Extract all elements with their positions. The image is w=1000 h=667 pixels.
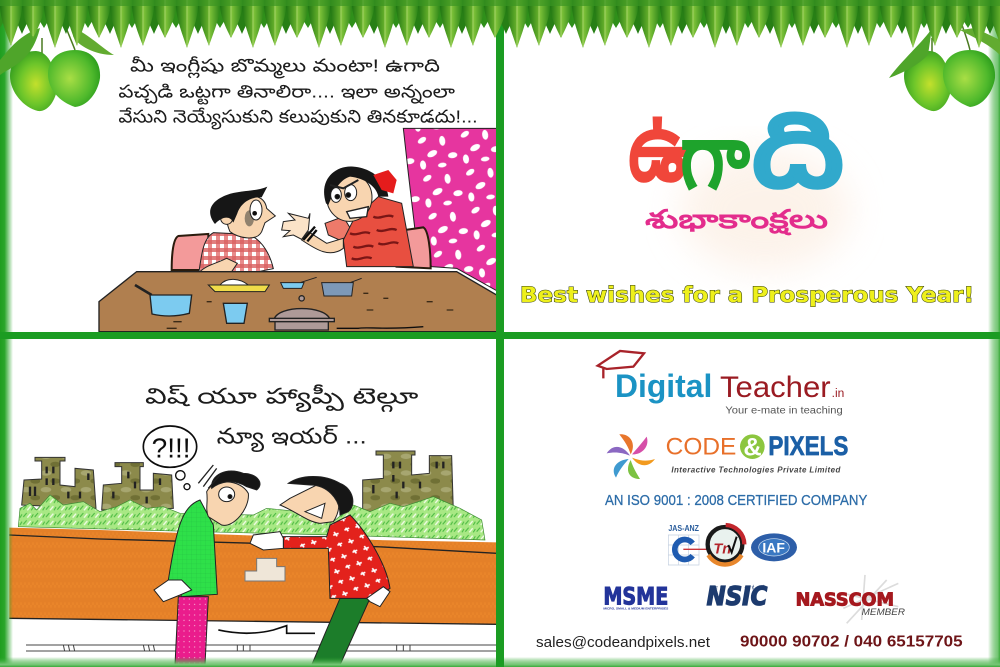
artist signature [337, 327, 423, 328]
MSME logo: MSME [603, 582, 668, 610]
hedge [18, 495, 485, 540]
IAF logo [751, 533, 797, 561]
panel: top-left cartoon, family at dinner table [99, 56, 497, 332]
hand with food [200, 258, 237, 278]
right chair [397, 227, 431, 268]
pink polka-dot curtain [403, 128, 497, 291]
TNV certification seal [708, 525, 744, 565]
hand-lettered Telugu speech: పచ్చడి ఒట్టగా తినాలిరా.... ఇలా అన్నంలా [118, 81, 455, 104]
icon: right mangoes with leaves [889, 25, 1000, 111]
Best wishes headline: Best wishes for a Prosperous Year! [520, 283, 974, 307]
eye socket shadow [245, 210, 254, 226]
hair [212, 471, 260, 490]
confused man in green [154, 465, 260, 665]
Code & Pixels logo: PIXELS [768, 431, 848, 461]
hair [210, 187, 267, 224]
NSIC logo: NSIC [707, 581, 768, 611]
hand [154, 580, 192, 602]
Digital Teacher logo: Your e-mate in teaching [725, 406, 843, 417]
pinwheel icon [607, 434, 655, 479]
Ugadi logotype [628, 90, 844, 209]
MSME logo: MICRO, SMALL & MEDIUM ENTERPRISES [603, 606, 668, 610]
eyes [219, 487, 235, 502]
NASSCOM member logo [796, 575, 905, 623]
hand-lettered Telugu speech: వేసుని నెయ్యేసుకుని కలుపుకుని తినకూడదు!... [118, 107, 478, 130]
Digital Teacher logo: .in [832, 386, 844, 400]
panel: company logos and contact details [536, 351, 963, 651]
NASSCOM member logo: NASSCOM [796, 589, 894, 610]
grey pot [322, 278, 362, 296]
exposed bricks [245, 558, 285, 581]
leaf, long left [0, 28, 40, 75]
Ugadi logotype: ది [752, 92, 844, 209]
Ugadi logotype: ఉ [628, 90, 690, 202]
leaf, right [73, 30, 114, 55]
left chair [172, 234, 208, 270]
ISO certification line: AN ISO 9001 : 2008 CERTIFIED COMPANY [605, 493, 868, 509]
head [227, 195, 275, 238]
email address: sales@codeandpixels.net [536, 635, 710, 651]
small bowl with ladle [281, 277, 317, 288]
phone numbers: 90000 90702 / 040 65157705 [740, 633, 963, 650]
TNV certification seal: Tn [713, 541, 731, 557]
blue pot [135, 285, 192, 316]
head [327, 173, 372, 221]
Subhakankshalu greeting: శుభాకాంక్షలు [645, 204, 828, 236]
mango, rear [10, 51, 57, 111]
ampersand badge: & [743, 434, 762, 462]
ear [221, 212, 233, 224]
mango, front [943, 50, 995, 107]
pink trousers [175, 597, 208, 665]
sari [343, 197, 413, 267]
red floral shirt [283, 515, 390, 598]
head [207, 482, 248, 525]
green shirt [168, 500, 217, 597]
Code & Pixels logo [607, 431, 848, 479]
hand-lettered Telugu speech [118, 56, 478, 130]
starburst [843, 575, 898, 623]
hand-lettered Telugu caption: విష్ యూ హ్యాప్పీ టెల్గూ [145, 383, 419, 412]
NSIC logo: एन एस आई सी [715, 584, 766, 590]
JAS-ANZ mark [668, 524, 707, 565]
thought bubble [143, 426, 197, 490]
Digital Teacher logo [598, 351, 844, 417]
sari pattern [350, 216, 398, 259]
Digital Teacher logo: Digital [615, 367, 712, 404]
hair [324, 167, 388, 205]
wall cracks [9, 535, 497, 624]
buildings [22, 451, 453, 512]
panel: bottom-left cartoon, Happy Telugu New Year [9, 383, 497, 665]
hand-lettered Telugu caption [145, 383, 419, 452]
orange wall [9, 528, 497, 624]
open hand [282, 213, 310, 239]
dining table [99, 272, 497, 332]
leaf, long left [889, 28, 932, 78]
green trousers [312, 598, 370, 665]
head-shake strokes [198, 465, 220, 488]
extended hand [250, 532, 283, 550]
cup [223, 303, 247, 323]
teeth [305, 503, 325, 518]
IAF logo: IAF [762, 539, 785, 555]
Code & Pixels logo: Interactive Technologies Private Limited [671, 466, 841, 475]
grinning man in red [250, 476, 390, 665]
hand on hip [367, 587, 390, 607]
graduation cap [598, 351, 644, 378]
hair [288, 476, 353, 515]
eye [250, 200, 262, 220]
eyes [330, 180, 358, 202]
man eating [199, 187, 275, 278]
mango, front [48, 50, 100, 107]
teeth [347, 207, 368, 218]
flower [373, 170, 397, 193]
hand-lettered Telugu speech: మీ ఇంగ్లీషు బొమ్మలు మంటా! ఉగాది [130, 56, 440, 79]
neem leaf garland across the top [0, 0, 1000, 50]
panel: Ugadi greeting [520, 90, 974, 307]
scolding woman [282, 167, 413, 267]
mango, rear [904, 51, 951, 111]
Code & Pixels logo: CODE [666, 433, 736, 460]
leaf, right [960, 28, 1000, 55]
head [280, 485, 339, 523]
building windows [30, 462, 443, 503]
pavement lines [26, 645, 497, 651]
soft peach glow [680, 150, 850, 270]
table grain marks [167, 293, 453, 328]
plate of rice [208, 279, 269, 292]
checked shirt [199, 233, 273, 277]
icon: left mangoes with leaves [0, 25, 114, 111]
NASSCOM member logo: MEMBER [862, 607, 905, 617]
Ugadi logotype: గా [680, 103, 750, 208]
hand-lettered Telugu caption: న్యూ ఇయర్ ... [217, 423, 367, 452]
bangles [303, 227, 317, 241]
pavement ticks [63, 645, 410, 651]
Digital Teacher logo: Teacher [720, 371, 831, 404]
arm [302, 232, 343, 253]
covered dish [269, 296, 334, 330]
artist signature [218, 626, 315, 633]
thought bubble: ?!!! [152, 433, 191, 464]
blouse [325, 217, 353, 242]
JAS-ANZ mark: JAS-ANZ [668, 524, 699, 533]
